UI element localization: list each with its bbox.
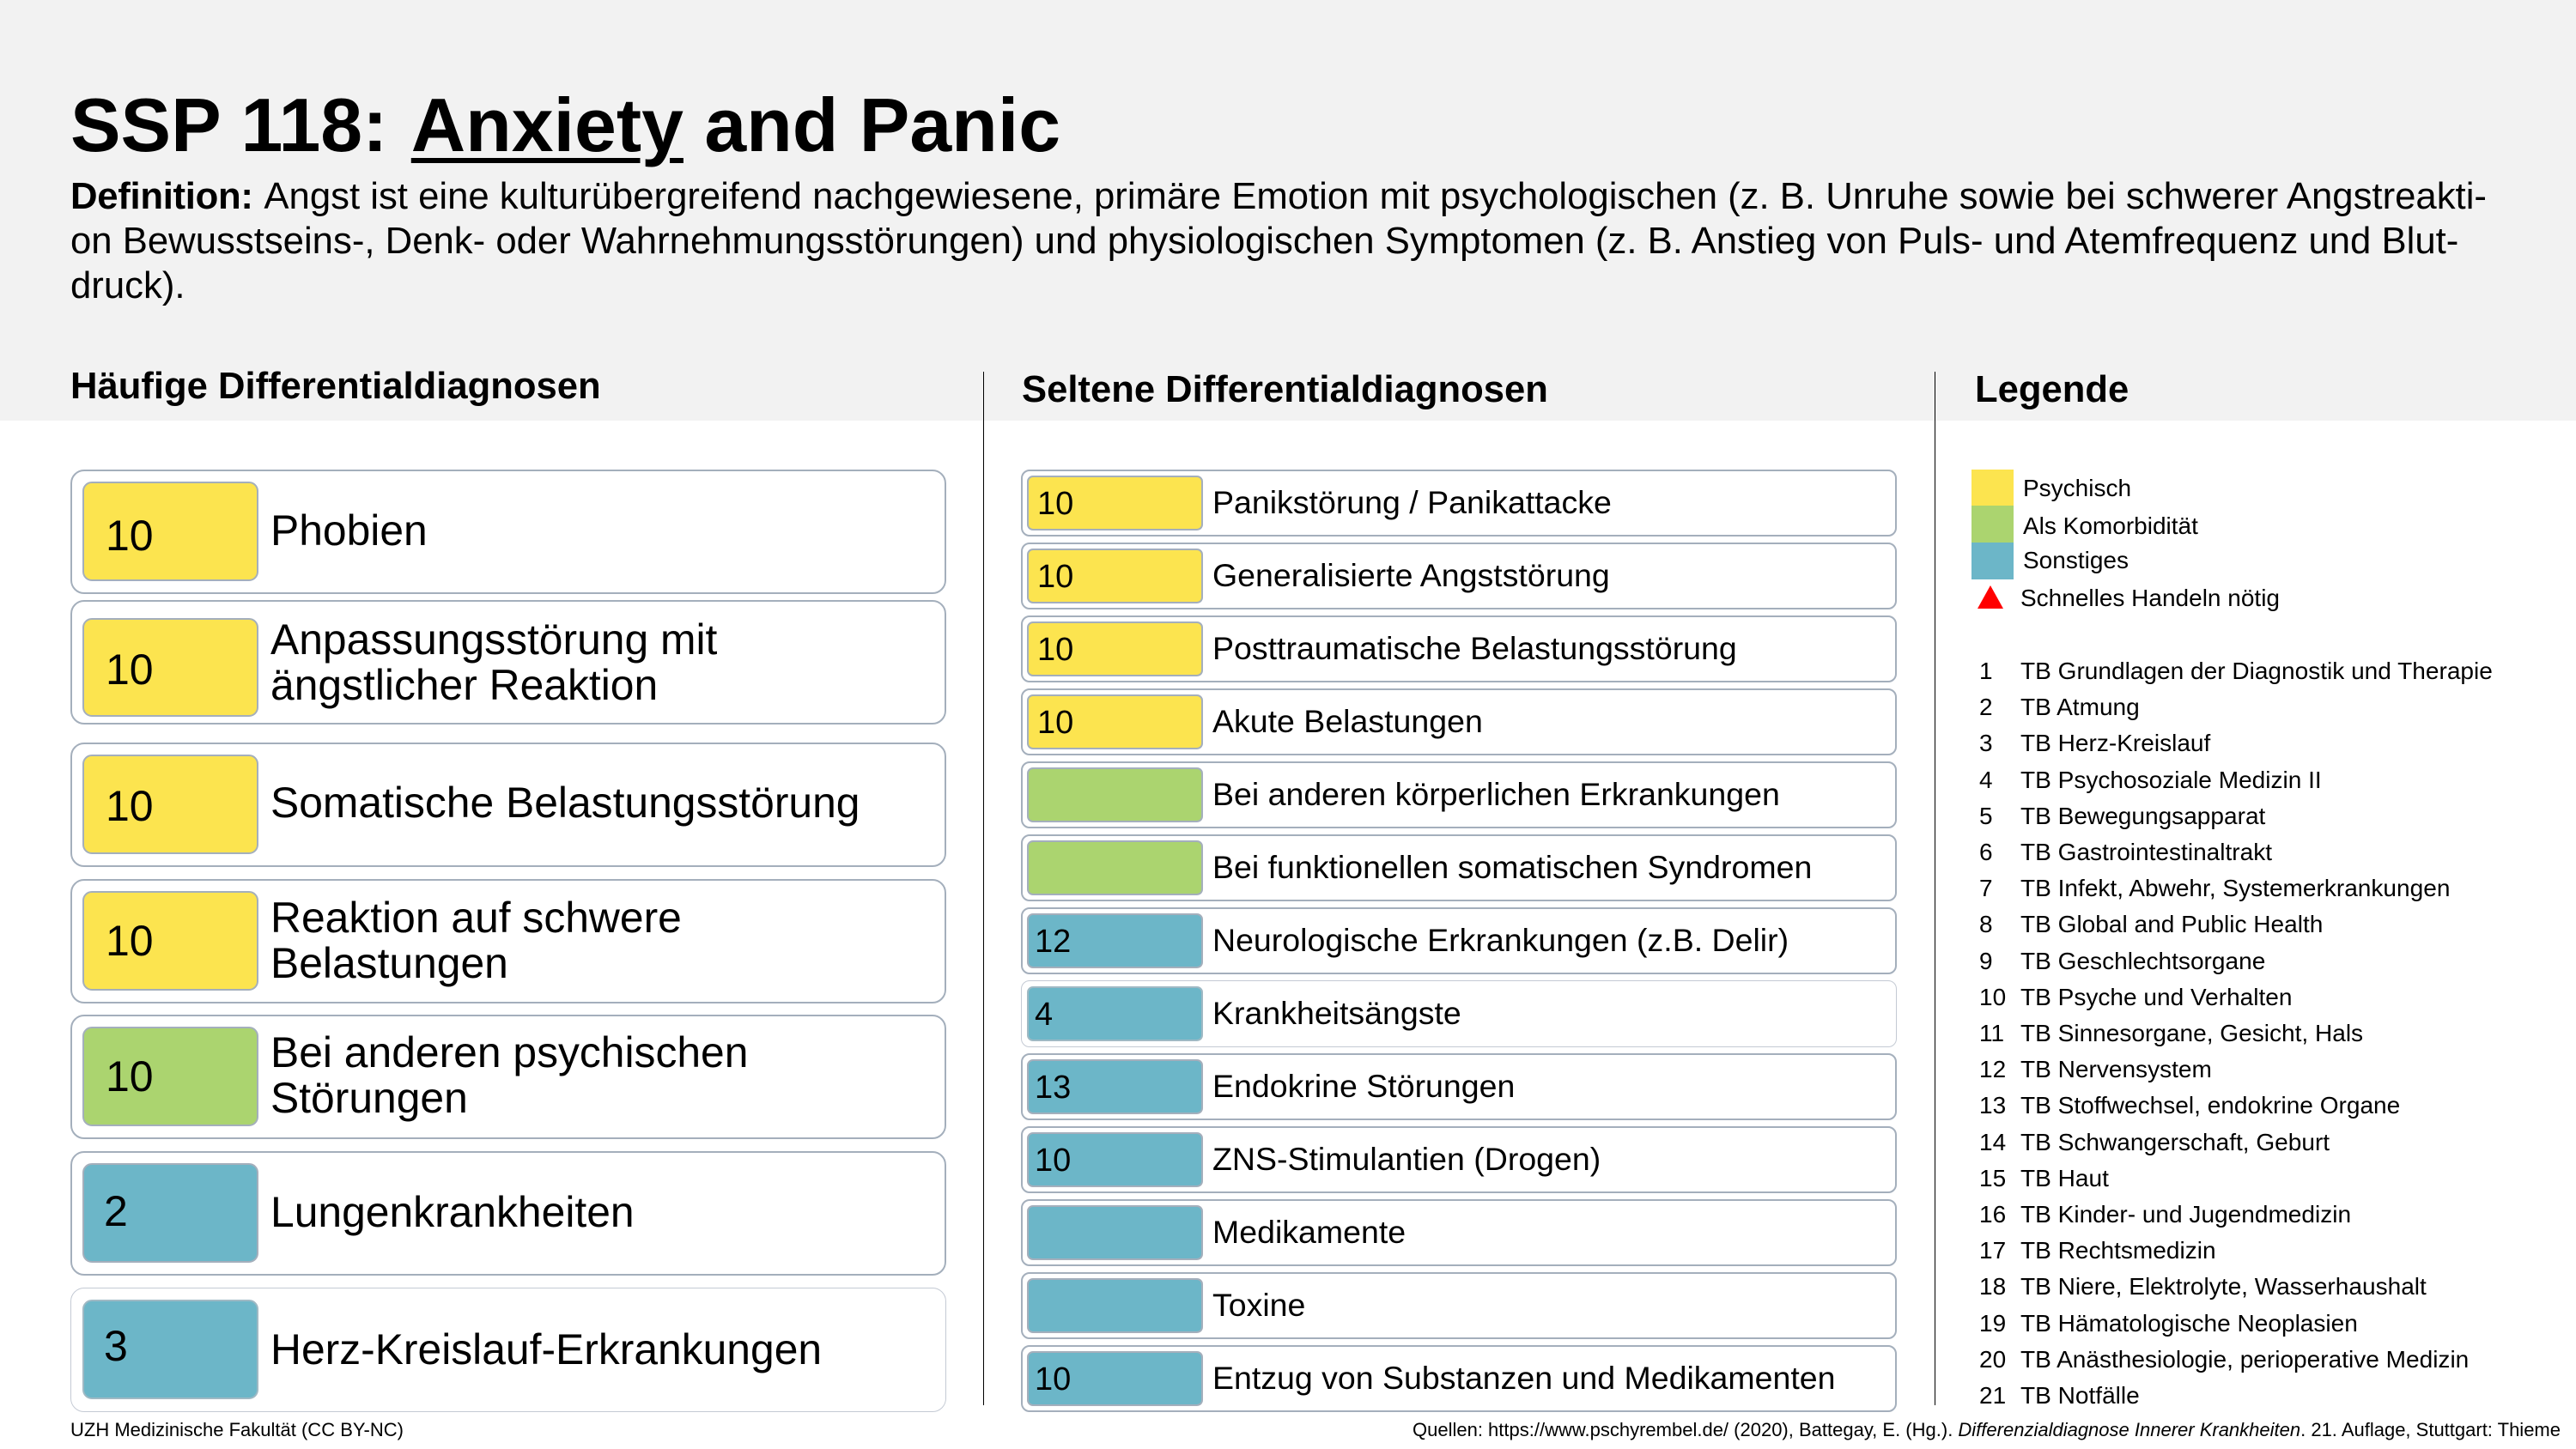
rare item: Toxine: Toxine — [1212, 1287, 1305, 1323]
textbook list: 12 — [1979, 1056, 2006, 1082]
legend label: Sonstiges: Sonstiges — [2023, 547, 2129, 573]
legend swatch: Psychisch — [1971, 470, 2014, 506]
frequent item: Reaktion auf schwere Belastungen: 10 — [106, 917, 154, 965]
legend label: Schnelles Handeln nötig: Schnelles Handeln nötig — [2020, 585, 2280, 611]
legend label: Als Komorbidität: Als Komorbidität — [2023, 512, 2198, 539]
rare item: Generalisierte Angststörung: 10 — [1037, 559, 1073, 595]
textbook list: TB Global and Public Health — [2020, 911, 2323, 937]
frequent item: Somatische Belastungsstörung: 10 — [106, 782, 154, 830]
frequent item: Anpassungsstörung: ängstlicher Reaktion — [270, 661, 658, 709]
textbook list: 16 — [1979, 1201, 2006, 1228]
frequent item: Anpassungsstörung: 10 — [106, 646, 154, 694]
rare item: Posttraumatische Belastungsstörung — [1021, 615, 1897, 682]
definition text: Definition: Angst ist eine kulturübergreifend nachgewiesene, primäre Emotion mit psychologischen (z. B. Unruhe sowie bei schwerer Angstreakti- — [70, 175, 2487, 217]
textbook list: 5 — [1979, 803, 1993, 829]
textbook list: TB Grundlagen der Diagnostik und Therapie — [2020, 658, 2493, 684]
textbook list: 6 — [1979, 839, 1993, 865]
rare item: Panikstörung: Panikstörung / Panikattacke — [1212, 484, 1612, 520]
heading: rare differential diagnoses: Seltene Differentialdiagnosen — [1022, 369, 1548, 410]
rare item: Posttraumatische Belastungsstörung: Posttraumatische Belastungsstörung — [1212, 630, 1737, 666]
legend swatch: Sonstiges — [1971, 543, 2014, 579]
frequent item: Bei anderen psychischen Störungen: Bei anderen psychischen — [270, 1028, 748, 1076]
header background band — [0, 0, 2576, 421]
footer: credit: UZH Medizinische Fakultät (CC BY-NC) — [70, 1419, 404, 1440]
textbook list: TB Nervensystem — [2020, 1056, 2212, 1082]
rare item: Endokrine Störungen — [1021, 1053, 1897, 1120]
textbook list: TB Haut — [2020, 1165, 2109, 1191]
heading: frequent differential diagnoses: Häufige Differentialdiagnosen — [70, 366, 601, 407]
rare item: Posttraumatische Belastungsstörung: 10 — [1037, 632, 1073, 668]
footer: sources: Quellen: https://www.pschyrembel.de/ (2020), Battegay, E. (Hg.). Differenzialdiagnose Innerer Krankheiten. 21. Auflage, Stuttgart: Thieme — [1413, 1419, 2561, 1440]
rare item: Entzug von Substanzen und Medikamenten: 10 — [1035, 1361, 1071, 1397]
textbook list: TB Rechtsmedizin — [2020, 1237, 2216, 1264]
textbook list: 7 — [1979, 875, 1993, 901]
textbook list: 8 — [1979, 911, 1993, 937]
textbook list: TB Kinder- und Jugendmedizin — [2020, 1201, 2351, 1228]
frequent item: Lungenkrankheiten: 2 — [104, 1187, 128, 1235]
frequent item: Bei anderen psychischen Störungen — [70, 1015, 946, 1139]
textbook list: TB Schwangerschaft, Geburt — [2020, 1129, 2330, 1155]
textbook list: TB Gastrointestinaltrakt — [2020, 839, 2272, 865]
textbook list: 17 — [1979, 1237, 2006, 1264]
textbook list: TB Psyche und Verhalten — [2020, 984, 2293, 1010]
rare item: Bei anderen körperlichen Erkrankungen: Bei anderen körperlichen Erkrankungen — [1212, 776, 1780, 812]
rare item: Krankheitsängste: Krankheitsängste — [1212, 995, 1461, 1031]
frequent item: Phobien: Phobien — [270, 506, 428, 555]
rare item: ZNS-Stimulantien: 10 — [1035, 1143, 1071, 1179]
textbook list: TB Psychosoziale Medizin II — [2020, 767, 2322, 793]
legend label: Psychisch: Psychisch — [2023, 475, 2131, 501]
textbook list: 19 — [1979, 1310, 2006, 1337]
frequent item: Bei anderen psychischen Störungen: 10 — [106, 1052, 154, 1100]
rare item: Medikamente: Medikamente — [1212, 1214, 1406, 1250]
title: SSP 118: Anxiety and Panic — [70, 83, 1060, 167]
rare item: Akute Belastungen — [1021, 688, 1897, 755]
frequent item: Herz-Kreislauf-Erkrankungen — [70, 1288, 946, 1412]
textbook list: TB Atmung — [2020, 694, 2140, 720]
rare item: Endokrine Störungen: 13 — [1035, 1070, 1071, 1106]
textbook list: 11 — [1979, 1020, 2004, 1046]
frequent item: Phobien — [70, 470, 946, 594]
frequent item: Herz-Kreislauf-Erkrankungen: Herz-Kreislauf-Erkrankungen — [270, 1325, 822, 1373]
textbook list: 15 — [1979, 1165, 2006, 1191]
textbook list: TB Geschlechtsorgane — [2020, 948, 2265, 974]
frequent item: Somatische Belastungsstörung: Somatische Belastungsstörung — [270, 779, 860, 827]
textbook list: 20 — [1979, 1346, 2006, 1373]
frequent item: Reaktion auf schwere Belastungen — [70, 879, 946, 1003]
textbook list: TB Anästhesiologie, perioperative Medizin — [2020, 1346, 2469, 1373]
frequent item: Lungenkrankheiten: Lungenkrankheiten — [270, 1188, 635, 1236]
frequent item: Reaktion auf schwere Belastungen: Belastungen — [270, 939, 508, 987]
textbook list: TB Infekt, Abwehr, Systemerkrankungen — [2020, 875, 2450, 901]
textbook list: TB Bewegungsapparat — [2020, 803, 2265, 829]
frequent item: Anpassungsstörung — [70, 600, 946, 724]
textbook list: 1 — [1979, 658, 1993, 684]
textbook list: 13 — [1979, 1092, 2006, 1119]
rare item: Panikstörung — [1021, 470, 1897, 537]
rare item: Panikstörung: 10 — [1037, 486, 1073, 522]
heading: legend: Legende — [1975, 369, 2129, 410]
textbook list: TB Stoffwechsel, endokrine Organe — [2020, 1092, 2400, 1119]
rare item: Medikamente — [1021, 1199, 1897, 1266]
definition text: druck). — [70, 264, 185, 306]
rare item: ZNS-Stimulantien — [1021, 1126, 1897, 1193]
rare item: Krankheitsängste — [1021, 980, 1897, 1047]
textbook list: TB Notfälle — [2020, 1382, 2140, 1409]
rare item: Akute Belastungen: 10 — [1037, 705, 1073, 741]
legend swatch: Als Komorbidität — [1971, 506, 2014, 543]
textbook list — [1979, 658, 2493, 1409]
frequent item: Lungenkrankheiten — [70, 1151, 946, 1276]
textbook list: 21 — [1979, 1382, 2006, 1409]
definition text: on Bewusstseins-, Denk- oder Wahrnehmungsstörungen) und physiologischen Symptomen (z. B. Anstieg von Puls- und Atemfrequenz und Blut- — [70, 220, 2458, 262]
frequent item: Bei anderen psychischen Störungen: Störungen — [270, 1074, 468, 1122]
rare item: Generalisierte Angststörung — [1021, 543, 1897, 609]
rare item: Akute Belastungen: Akute Belastungen — [1212, 703, 1483, 739]
rare item: Generalisierte Angststörung: Generalisierte Angststörung — [1212, 557, 1610, 593]
divider left — [983, 372, 984, 1405]
textbook list: 2 — [1979, 694, 1993, 720]
frequent item: Somatische Belastungsstörung — [70, 743, 946, 867]
definition text — [70, 175, 2487, 306]
textbook list: 10 — [1979, 984, 2006, 1010]
rare item: Entzug von Substanzen und Medikamenten: Entzug von Substanzen und Medikamenten — [1212, 1360, 1835, 1396]
rare item: ZNS-Stimulantien: ZNS-Stimulantien (Drogen) — [1212, 1141, 1601, 1177]
textbook list: 3 — [1979, 730, 1993, 756]
rare item: Toxine — [1021, 1272, 1897, 1339]
textbook list: 18 — [1979, 1273, 2006, 1300]
textbook list: 4 — [1979, 767, 1993, 793]
rare item: Neurologische Erkrankungen — [1021, 907, 1897, 974]
rare item: Krankheitsängste: 4 — [1035, 997, 1053, 1033]
rare item: Entzug von Substanzen und Medikamenten — [1021, 1345, 1897, 1412]
textbook list: TB Herz-Kreislauf — [2020, 730, 2210, 756]
icon: red triangle — [1978, 585, 2003, 609]
rare item: Bei funktionellen somatischen Syndromen: Bei funktionellen somatischen Syndromen — [1212, 849, 1812, 885]
frequent item: Anpassungsstörung: Anpassungsstörung mit — [270, 615, 717, 664]
textbook list: 9 — [1979, 948, 1993, 974]
textbook list: 14 — [1979, 1129, 2006, 1155]
rare item: Bei funktionellen somatischen Syndromen — [1021, 834, 1897, 901]
rare item: Neurologische Erkrankungen: Neurologische Erkrankungen (z.B. Delir) — [1212, 922, 1789, 958]
rare item: Bei anderen körperlichen Erkrankungen — [1021, 761, 1897, 828]
textbook list: TB Sinnesorgane, Gesicht, Hals — [2020, 1020, 2363, 1046]
frequent item: Reaktion auf schwere Belastungen: Reaktion auf schwere — [270, 894, 682, 942]
rare item: Endokrine Störungen: Endokrine Störungen — [1212, 1068, 1515, 1104]
textbook list: TB Hämatologische Neoplasien — [2020, 1310, 2358, 1337]
frequent item: Phobien: 10 — [106, 512, 154, 560]
frequent item: Herz-Kreislauf-Erkrankungen: 3 — [104, 1322, 128, 1370]
textbook list: TB Niere, Elektrolyte, Wasserhaushalt — [2020, 1273, 2427, 1300]
rare item: Neurologische Erkrankungen: 12 — [1035, 924, 1071, 960]
